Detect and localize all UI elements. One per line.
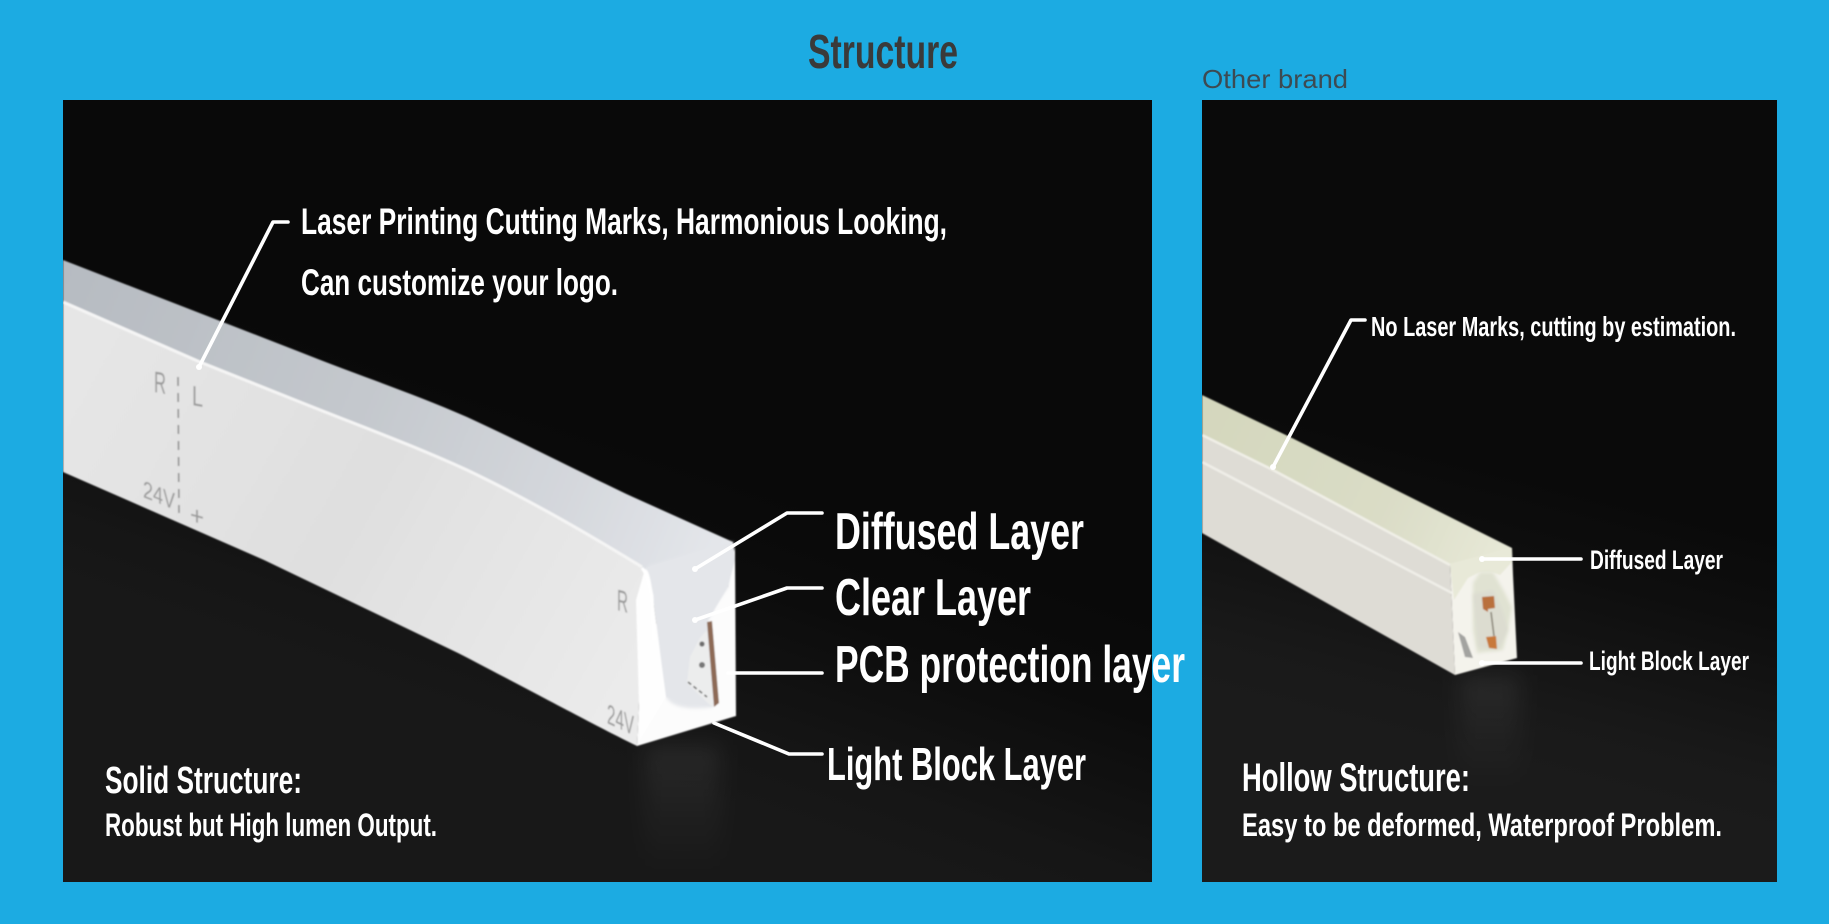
caption: solid structure: Solid Structure: xyxy=(105,760,302,802)
callout: clear layer: Clear Layer xyxy=(835,569,1031,627)
callout: no laser marks xyxy=(1270,311,1736,470)
caption: solid structure xyxy=(105,760,437,843)
caption: solid structure: Robust but High lumen Output. xyxy=(105,807,437,843)
callout: diffused layer: Diffused Layer xyxy=(835,503,1084,561)
callout: light block layer: Light Block Layer xyxy=(827,738,1086,790)
callout: pcb protection layer: PCB protection layer xyxy=(835,636,1185,694)
printed cut marks: R xyxy=(617,583,628,620)
callout: diffused layer xyxy=(692,503,1084,572)
printed cut marks: 24V xyxy=(143,476,175,516)
floor reflection xyxy=(1464,677,1516,726)
callout: laser printing marks: Laser Printing Cutting Marks, Harmonious Looking, xyxy=(301,201,947,242)
caption: hollow structure: Hollow Structure: xyxy=(1242,756,1470,800)
printed cut marks: R xyxy=(154,366,166,401)
printed cut marks: L xyxy=(192,379,203,413)
callout: laser printing marks: Can customize your logo. xyxy=(301,262,618,303)
photo: hollow neon strip xyxy=(1202,395,1517,675)
callout: laser printing marks xyxy=(196,201,947,370)
printed cut marks xyxy=(143,366,634,742)
caption: hollow structure xyxy=(1242,756,1722,843)
callout: clear layer xyxy=(692,569,1031,627)
callout: other brand diffused layer xyxy=(1479,545,1723,575)
callout: light block layer xyxy=(714,723,1086,790)
callout: other brand light block layer xyxy=(1479,646,1749,676)
callout: other brand diffused layer: Diffused Layer xyxy=(1590,545,1723,575)
photo: solid neon strip xyxy=(63,260,736,746)
callout: other brand light block layer: Light Block Layer xyxy=(1589,646,1749,676)
printed cut marks: + xyxy=(190,499,204,533)
floor reflection xyxy=(648,747,716,804)
title: Structure xyxy=(808,26,958,79)
printed cut marks: 24V xyxy=(607,698,634,742)
label: other brand: Other brand xyxy=(1202,64,1348,94)
panel: hollow structure xyxy=(1202,100,1777,882)
panel: solid structure xyxy=(63,100,1152,882)
